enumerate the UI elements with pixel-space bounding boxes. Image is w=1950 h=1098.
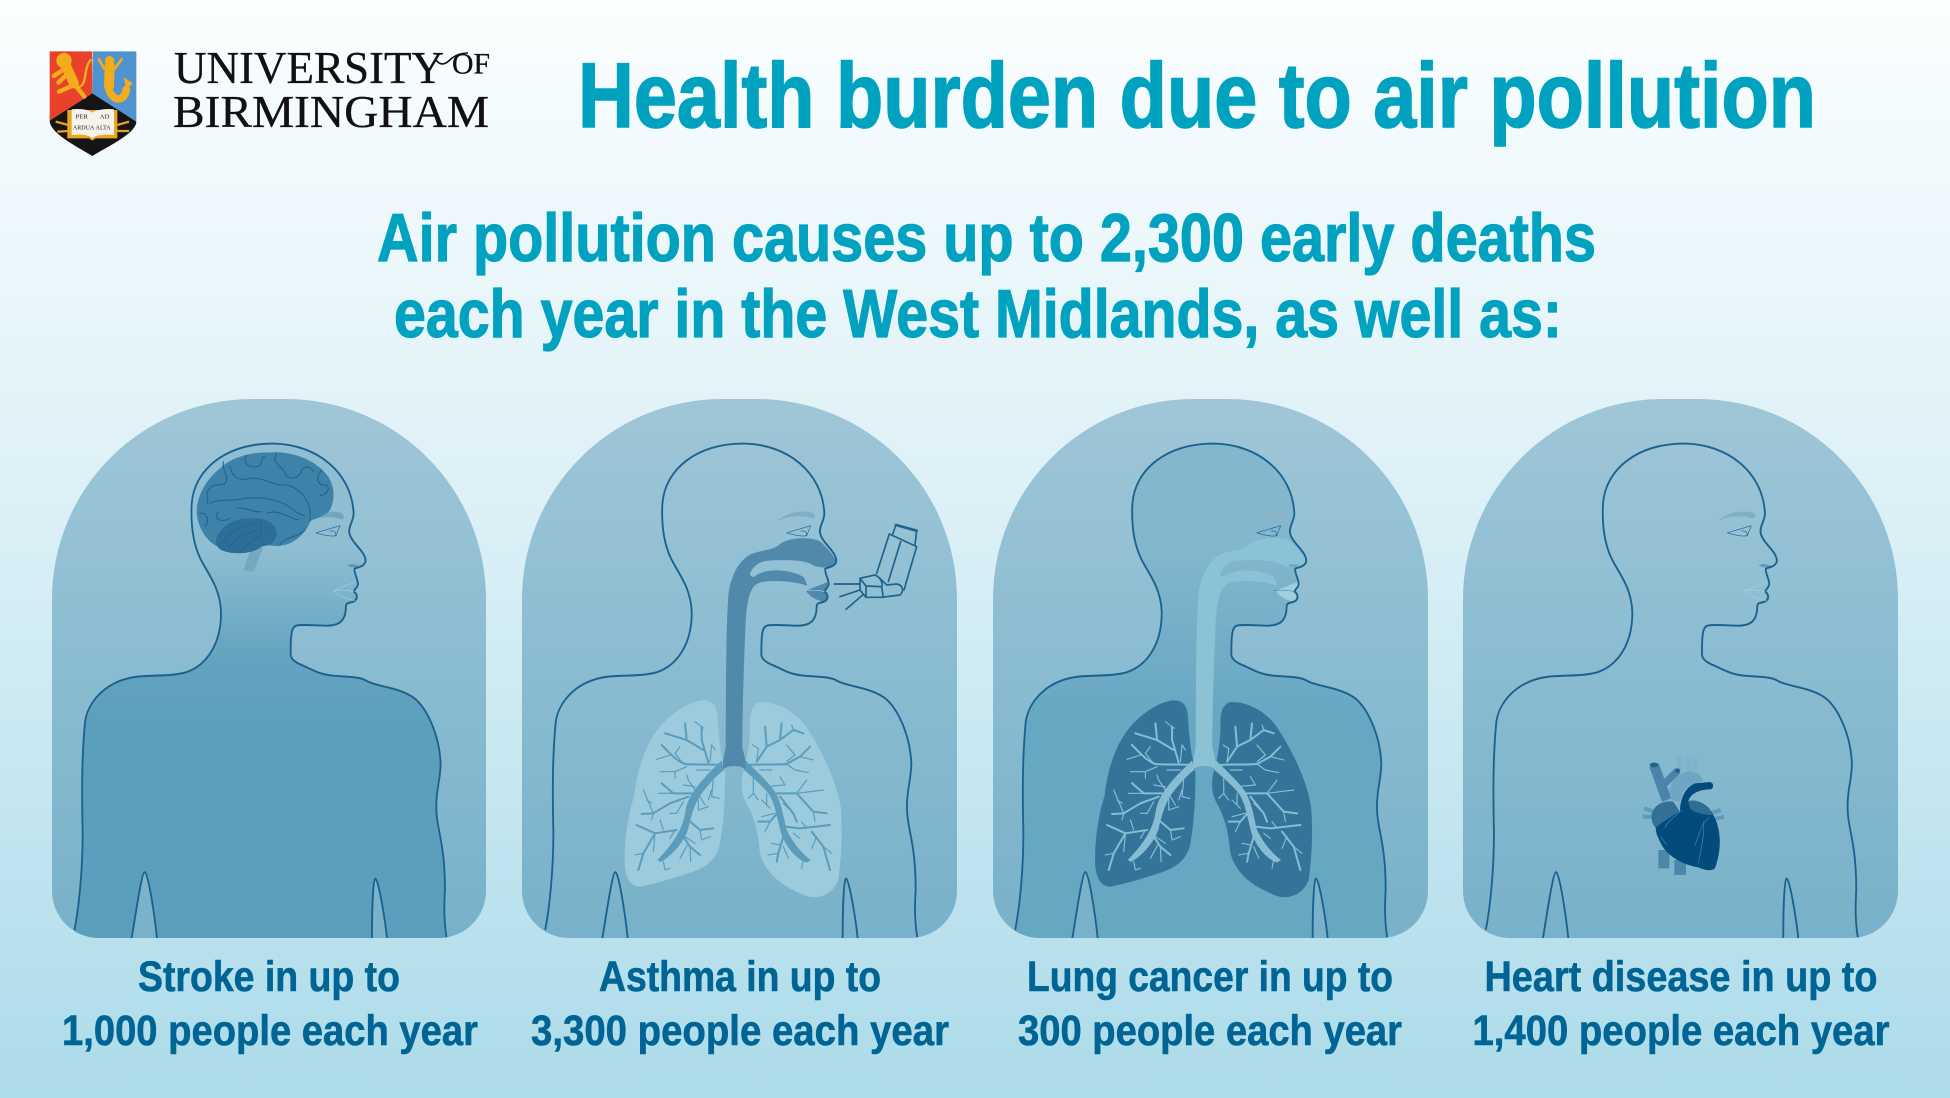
panel background [1463, 399, 1898, 938]
icon: heart [1643, 757, 1724, 875]
icon: brain [197, 452, 334, 572]
captions [62, 953, 1890, 1055]
airway [723, 538, 837, 769]
panel: lung cancer [993, 399, 1428, 938]
caption: lung cancer [1018, 953, 1402, 1055]
logo wordmark: UNIVERSITY [174, 42, 444, 93]
logo wordmark [173, 42, 490, 137]
panel background [522, 399, 957, 938]
logo wordmark: BIRMINGHAM [173, 86, 489, 137]
subheading: each year in the West Midlands, as well as: [394, 276, 1562, 352]
caption: stroke: 1,000 people each year [62, 1007, 478, 1055]
caption: asthma: Asthma in up to [599, 953, 881, 1001]
panel background [52, 399, 486, 938]
body illustration with diseased lungs [1011, 444, 1387, 938]
body outline [1015, 444, 1387, 938]
caption: heart disease [1472, 953, 1890, 1055]
airway [1193, 538, 1307, 769]
body illustration with brain [70, 444, 447, 938]
icon: inhaler [834, 525, 917, 609]
subheading [377, 200, 1596, 352]
caption: stroke: Stroke in up to [138, 953, 400, 1001]
book motto: PER [76, 114, 88, 121]
book motto: ALTA [96, 125, 111, 131]
caption: heart disease: Heart disease in up to [1484, 953, 1878, 1001]
caption: lung cancer: 300 people each year [1018, 1007, 1402, 1055]
lips [806, 582, 828, 601]
book motto: AD [100, 114, 109, 121]
caption: lung cancer: Lung cancer in up to [1027, 953, 1393, 1001]
logo: University of Birmingham [50, 42, 490, 156]
lips [1276, 582, 1298, 601]
caption: asthma [531, 953, 949, 1055]
caption: heart disease: 1,400 people each year [1472, 1007, 1890, 1055]
panel: heart disease [1463, 399, 1898, 938]
subheading: Air pollution causes up to 2,300 early deaths [377, 200, 1596, 276]
body outline [75, 444, 447, 938]
panel: stroke [52, 399, 486, 938]
icon: lungs with bronchial tree [1095, 700, 1312, 897]
body outline illustration [1486, 444, 1858, 938]
logo wordmark: OF [452, 48, 490, 80]
body illustration with airway [545, 444, 917, 938]
icon: lungs with bronchial tree [625, 700, 842, 897]
panel: asthma [522, 399, 957, 938]
icon: shield crest [50, 51, 136, 156]
caption: asthma: 3,300 people each year [531, 1007, 949, 1055]
panel background [993, 399, 1428, 938]
book motto: ARDUA [73, 125, 95, 131]
body outline [545, 444, 917, 938]
caption: stroke [62, 953, 478, 1055]
